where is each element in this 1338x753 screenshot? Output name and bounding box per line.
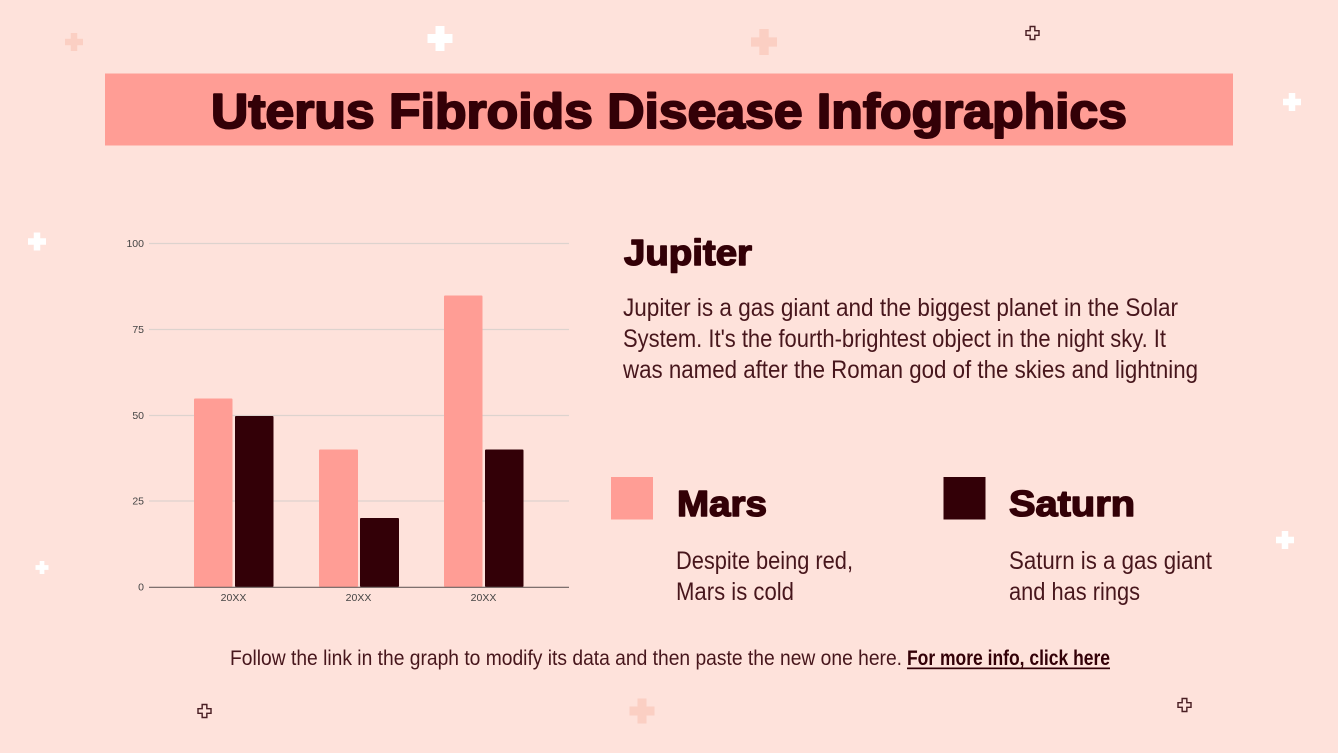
title banner [105,74,1233,146]
legend: Saturn [944,477,1212,606]
Jupiter description: Jupiter is a gas giant and the biggest planet in the Solar [623,294,1178,322]
Jupiter description: System. It's the fourth-brightest object in the night sky. It [623,325,1166,353]
bar chart: 100 [126,238,144,250]
bar chart: 50 [132,410,144,422]
bar chart: 20XX [471,592,496,604]
bar chart: 0 [138,582,144,594]
bar chart: 20XX [346,592,371,604]
Saturn swatch [944,477,986,520]
Jupiter heading: Jupiter [624,232,752,273]
footer note: Follow the link in the graph to modify its data and then paste the new one here. [230,647,902,670]
bar chart: 25 [132,496,144,508]
Saturn description: Saturn is a gas giant [1009,547,1212,575]
bar chart: 75 [132,324,144,336]
Saturn description [1009,547,1212,606]
Jupiter description [622,294,1198,384]
Mars heading: Mars [677,483,767,524]
bar chart: 20XX [221,592,246,604]
Saturn heading: Saturn [1009,483,1135,524]
bar chart [126,238,569,604]
Mars swatch [611,477,653,520]
Mars description: Mars is cold [676,578,794,606]
Mars description: Despite being red, [676,547,853,575]
footer link: For more info, click here [907,647,1110,670]
Saturn description: and has rings [1009,578,1140,606]
legend: Mars [611,477,853,606]
title: Uterus Fibroids Disease Infographics [211,85,1127,139]
Jupiter description: was named after the Roman god of the skies and lightning [622,356,1198,384]
Mars description [676,547,853,606]
